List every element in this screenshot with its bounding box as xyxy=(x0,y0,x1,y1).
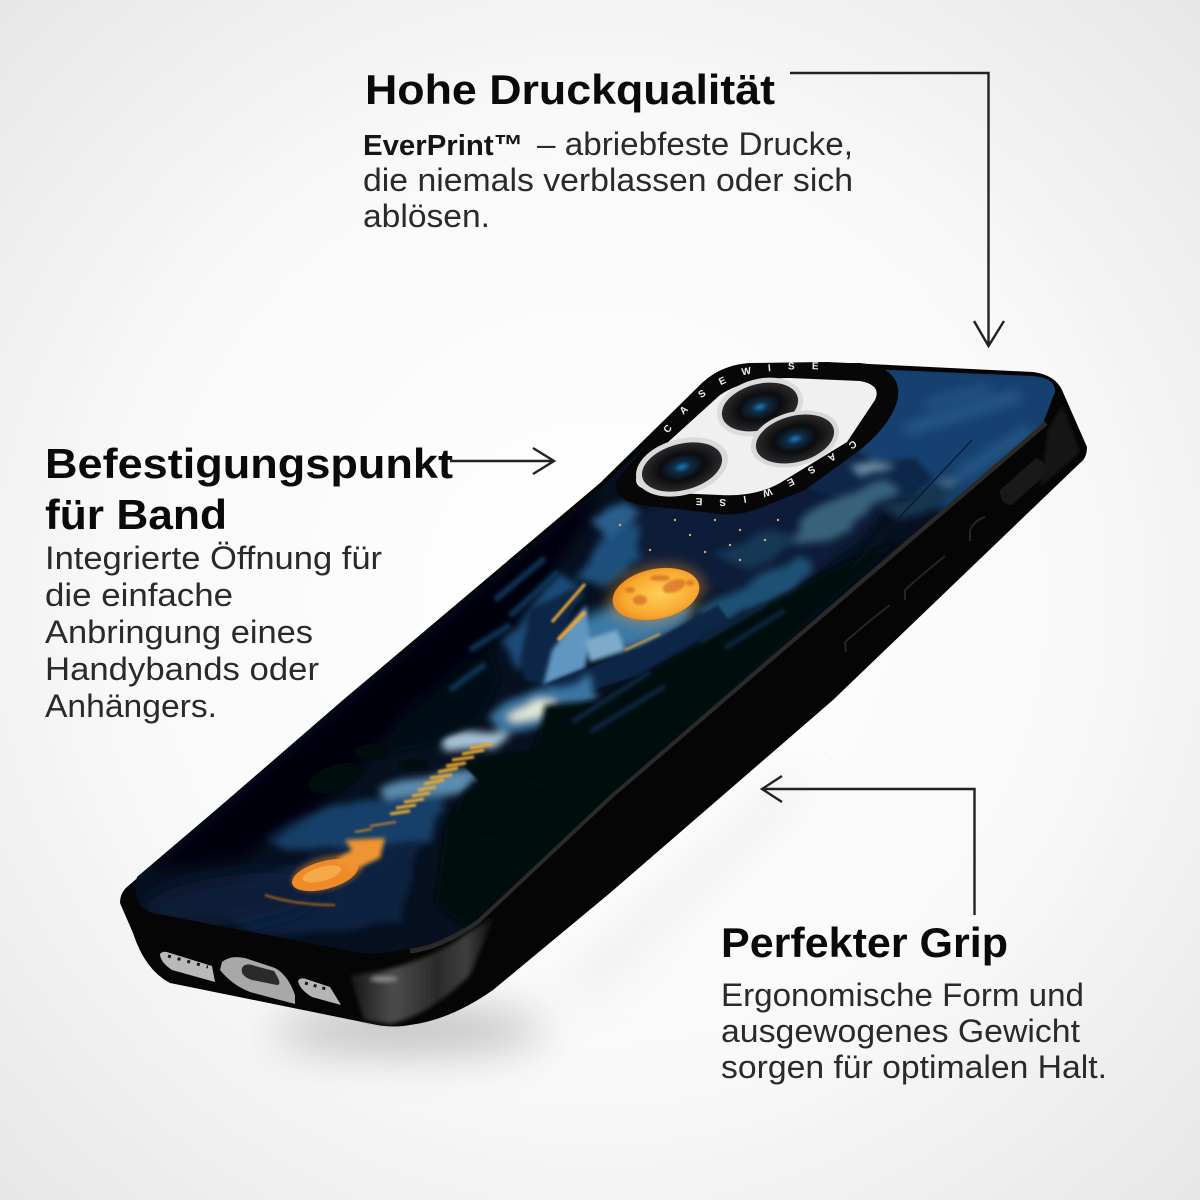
golden edge lights on peak xyxy=(552,584,680,650)
thin crack line xyxy=(850,440,972,570)
mist and river xyxy=(200,678,600,935)
phone shadow xyxy=(275,770,810,1052)
castle cloud silhouette xyxy=(808,450,934,499)
side buttons xyxy=(845,517,985,652)
blue streaks on edge xyxy=(450,558,558,690)
text block: Ergonomische Form und xyxy=(721,977,1084,1013)
clouds xyxy=(500,458,965,670)
heading: Befestigungspunkt xyxy=(45,440,453,487)
dark central sky xyxy=(593,488,887,597)
phone case xyxy=(120,362,1087,1026)
printed artwork xyxy=(136,370,1055,954)
text block: ausgewogenes Gewicht xyxy=(721,1013,1080,1049)
text block xyxy=(721,977,1107,1085)
distant ridge xyxy=(546,604,728,690)
text block: sorgen für optimalen Halt. xyxy=(721,1049,1107,1085)
text block xyxy=(45,540,382,724)
lens: left xyxy=(629,428,735,506)
forest highlights xyxy=(572,604,785,732)
stars xyxy=(618,518,780,562)
moon reflection streak xyxy=(355,744,492,832)
corner shine xyxy=(350,915,495,1024)
text block: EverPrint™ xyxy=(363,130,523,162)
screen lip xyxy=(410,423,1046,951)
heading: Perfekter Grip xyxy=(721,919,1008,966)
arrow xyxy=(450,448,554,474)
sky streaks xyxy=(905,388,1030,475)
port: left speaker xyxy=(160,952,215,982)
heading xyxy=(45,440,453,538)
case side sheen xyxy=(1040,405,1080,488)
callout: Perfekter Grip xyxy=(721,776,1107,1085)
lit mountain xyxy=(543,605,590,685)
text block: die einfache xyxy=(45,577,233,613)
arrow xyxy=(790,73,1004,346)
text block: – abriebfeste Drucke, xyxy=(537,126,853,162)
camera bump xyxy=(616,362,898,515)
text block: Anbringung eines xyxy=(45,614,313,650)
port: usb xyxy=(220,957,295,1004)
dark mountain xyxy=(520,582,585,685)
heading: Hohe Druckqualität xyxy=(365,66,775,113)
dark upper edge xyxy=(150,488,600,870)
forest xyxy=(380,540,900,930)
camera bump: CASEWISE xyxy=(696,441,856,506)
glow around moon xyxy=(566,596,700,662)
text block: Handybands oder xyxy=(45,651,319,687)
bottom water xyxy=(143,870,288,928)
lens: right xyxy=(745,401,845,477)
reflected moon xyxy=(265,838,385,905)
bump frame xyxy=(616,363,898,515)
rocks xyxy=(308,744,536,824)
heading: für Band xyxy=(45,491,227,538)
text block: ablösen. xyxy=(363,198,490,234)
case body xyxy=(120,362,1087,1026)
distant peak xyxy=(585,630,625,662)
text block: Anhängers. xyxy=(45,688,217,724)
callout: Befestigungspunkt xyxy=(45,440,554,724)
port: right speaker xyxy=(298,978,341,1005)
callout: Hohe Druckqualität xyxy=(363,66,1004,346)
text block: Integrierte Öffnung für xyxy=(45,540,382,576)
lens: top xyxy=(710,369,810,445)
text block xyxy=(363,126,853,234)
brand ring text: CASEWISE xyxy=(664,362,818,432)
text block: die niemals verblassen oder sich xyxy=(363,162,853,198)
bump window xyxy=(636,378,877,495)
night sky xyxy=(856,370,1055,514)
arrow xyxy=(762,776,974,915)
moon xyxy=(601,554,711,634)
